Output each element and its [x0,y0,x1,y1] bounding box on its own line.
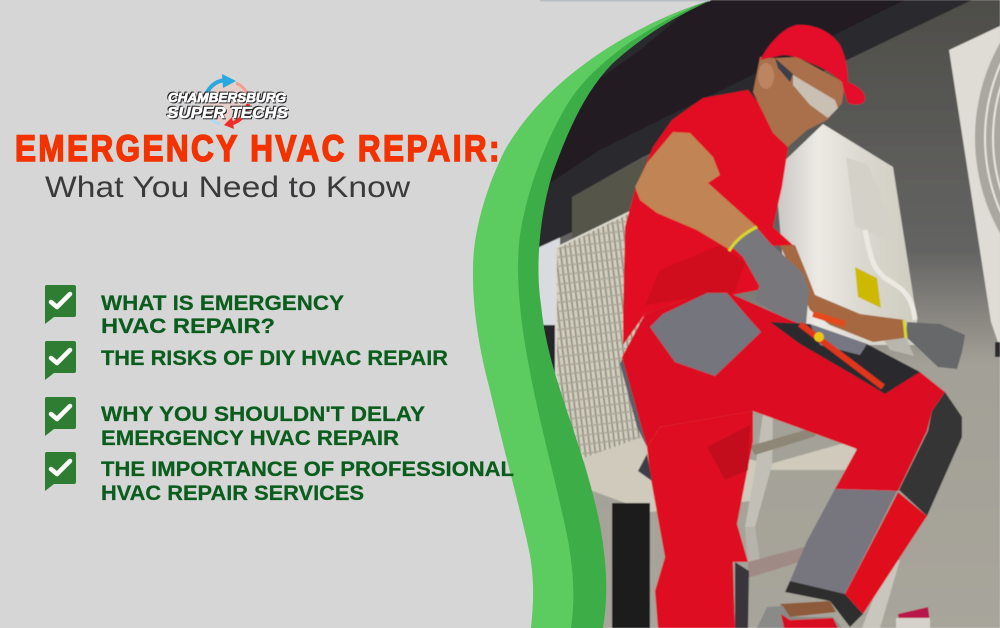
green swoosh: light band [473,0,712,628]
item 3 text: EMERGENCY HVAC REPAIR [101,427,399,450]
top edge strip [540,0,710,2]
item 1 text: HVAC REPAIR? [101,315,275,338]
logo: Chambersburg Super Techs [167,74,288,129]
man: red shirt [623,90,793,345]
icon: check bubble 2 [45,341,76,380]
icon: check bubble 1 [45,285,76,324]
man: red screwdriver [800,314,883,387]
man: right forearm [780,245,905,342]
checklist [45,285,514,505]
photo: technician repairing outdoor AC units [520,0,1000,628]
item 3 text: WHY YOU SHOULDN'T DELAY [101,403,425,426]
man: shoe and ankle [757,601,842,628]
man: tool pouch [770,322,920,394]
man: side panel of trousers [620,352,658,447]
list item 1 [45,285,344,338]
photo: dark gap under sky [530,325,558,385]
photo: black drain pipe [612,503,650,628]
item 2 text: THE RISKS OF DIY HVAC REPAIR [101,347,448,370]
list item 4 [45,452,514,505]
green swoosh: dark band [460,0,712,628]
man: front leg [647,411,753,628]
photo: left outdoor unit [556,212,664,460]
photo: yellow sticker [855,267,881,308]
photo: sky gap [530,225,560,335]
item 1 text: WHAT IS EMERGENCY [101,292,344,315]
item 4 text: HVAC REPAIR SERVICES [101,482,364,505]
man: left glove [729,227,809,325]
man: shirt shadow [645,245,745,305]
logo: blue arrow arc [205,74,236,124]
man: head and neck [753,57,845,147]
logo: Chambersburg wordmark: CHAMBERSBURG [168,90,286,105]
photo: wall [520,0,1000,628]
icon: check bubble 3 [45,397,76,436]
photo: unit valve cover [846,157,892,243]
photo: ladder [745,335,930,628]
man: dark lower panel [735,562,749,628]
man: safety glasses [775,58,838,118]
man: trousers thigh [622,292,945,491]
man: ear [758,63,774,89]
photo: brown wall section [572,150,700,300]
logo: pale globe [205,81,247,123]
title: EMERGENCY HVAC REPAIR: [15,129,500,170]
man: front leg shadow [707,425,750,480]
man: grey shin panel [790,489,897,594]
photo: gutter [540,0,905,190]
photo: middle outdoor unit [775,124,917,345]
list item 2 [45,341,448,380]
photo: white cable [865,230,915,320]
subtitle: What You Need to Know [45,170,411,204]
man: grey trouser pocket [650,293,761,376]
photo: dark soffit [520,0,972,256]
logo: Super Techs wordmark: SUPER TECHS [167,105,288,122]
man: knee patch [899,392,962,516]
item 4 text: THE IMPORTANCE OF PROFESSIONAL [101,458,514,481]
logo: red arrow arc [224,83,248,129]
man: bare arm [635,132,757,250]
icon: check bubble 4 [45,452,76,491]
photo: right outdoor unit [949,0,1000,357]
man: red cap [760,25,865,105]
gray cover for the area left of the swoosh [0,0,712,628]
man: red shin panel [845,492,927,614]
man: flap behind leg [638,454,652,481]
list item 3 [45,397,425,450]
man: right glove [904,320,965,369]
man: trouser cuff [785,581,863,627]
photo: unit base and bracket [583,436,858,512]
